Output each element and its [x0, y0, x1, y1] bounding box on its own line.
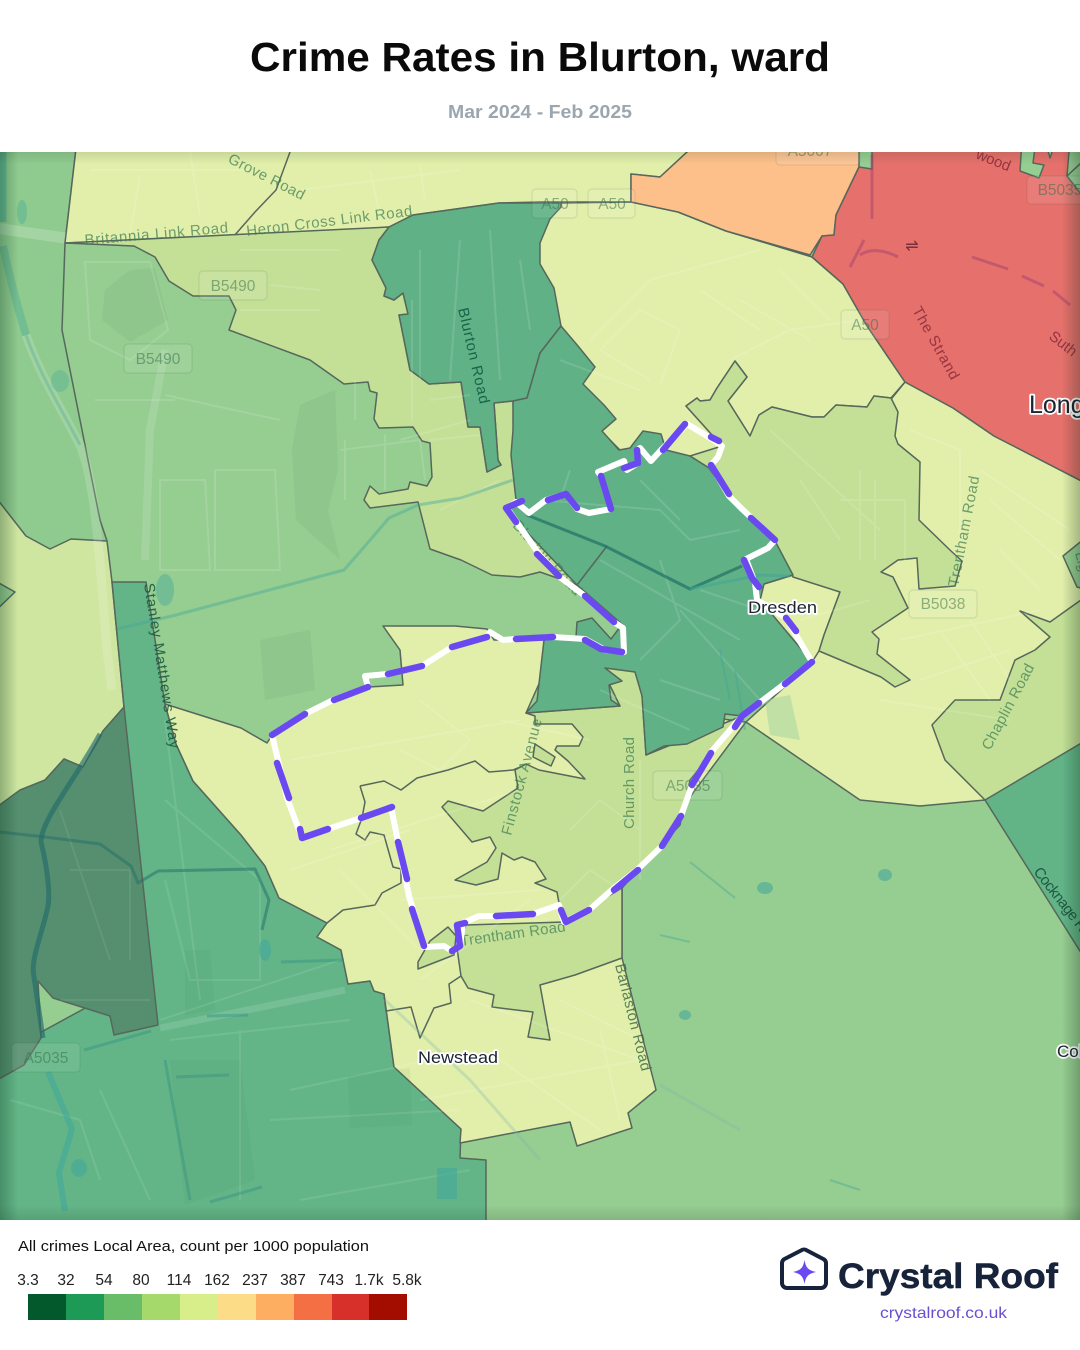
road labels: wood — [973, 146, 1013, 175]
icon: house with star — [782, 1250, 826, 1288]
map line: inner boundary between dark zones — [577, 546, 607, 585]
road labels: Blurton Road — [509, 517, 585, 599]
road number shields: A5035 — [666, 778, 710, 795]
legend tick labels: 54 — [95, 1272, 113, 1289]
logo wordmark: Crystal Roof — [838, 1257, 1058, 1296]
map zone: dark green central — [505, 326, 812, 755]
map zone: small left patch — [0, 582, 16, 608]
map zone: left yellow-green — [0, 490, 124, 815]
map edge shading — [0, 152, 1080, 1220]
road labels — [84, 146, 1080, 1073]
map zone: top-right green corner — [1066, 163, 1080, 193]
map zone: Chaplin Road light green — [932, 590, 1080, 800]
legend tick labels — [17, 1272, 422, 1289]
map zone: right-edge green patch — [1062, 541, 1080, 589]
road labels: Britannia Link Road — [84, 219, 229, 249]
road number shields: A50 — [598, 196, 626, 213]
legend title: All crimes Local Area, count per 1000 population — [18, 1239, 369, 1255]
map shaded land blocks — [398, 1068, 410, 1081]
icon: railway station: ⇌ — [905, 238, 919, 255]
map zone: far-left strip — [0, 140, 107, 549]
map: red zone rail lines — [850, 155, 1070, 305]
map zone: south ward light green — [457, 888, 622, 1040]
legend tick labels: 1.7k — [354, 1272, 384, 1289]
ward boundary: purple dashes — [272, 424, 812, 951]
road number shields: A50 — [541, 196, 569, 213]
road labels: Church Road — [621, 737, 638, 829]
legend tick labels: 237 — [242, 1272, 268, 1289]
map zone: east light green — [686, 361, 962, 687]
legend tick labels: 387 — [280, 1272, 306, 1289]
title: Crime Rates in Blurton, ward — [250, 34, 830, 80]
map: pale park block near Dresden — [765, 695, 800, 740]
subtitle: date range: Mar 2024 - Feb 2025 — [448, 102, 632, 122]
road number shields: B5490 — [136, 351, 181, 368]
map zone: ward light green — [442, 665, 742, 922]
map zone: orange — [631, 140, 859, 255]
map zone: teal south-west — [0, 582, 486, 1235]
map streets — [0, 152, 1070, 1200]
legend tick labels: 114 — [167, 1272, 192, 1289]
road labels: Barlaston Road — [611, 962, 654, 1073]
road labels: Heron Cross Link Road — [245, 203, 413, 240]
road number shields: A5007 — [788, 143, 832, 160]
map zone: Dresden pale yellow — [760, 575, 840, 662]
map zone: dark grey-green — [0, 707, 158, 1084]
map zone: small patch near Trentham Road — [418, 927, 456, 969]
road number shields: A5035 — [24, 1050, 68, 1067]
place labels: Dresden — [748, 598, 817, 617]
ward boundary: white line — [272, 424, 812, 951]
logo — [782, 1250, 1058, 1322]
road labels: Trentham Road — [459, 918, 567, 950]
road labels: Finstock Avenue — [498, 717, 546, 837]
road labels: Stanley Matthews Way — [140, 582, 183, 750]
map line: west boundary of far-left strip — [62, 140, 107, 541]
map zone: south-east teal — [984, 743, 1080, 952]
road labels: Blurton Road — [454, 306, 493, 405]
road labels: Suth — [1046, 328, 1080, 360]
map lines: internal ward boundaries — [327, 761, 523, 1038]
map zone: dark green north — [372, 203, 561, 472]
road labels: Chaplin Road — [979, 661, 1038, 753]
map zone: ward central pale yellow — [165, 626, 746, 1146]
road labels: The Strand — [909, 304, 963, 383]
website url: crystalroof.co.uk — [880, 1305, 1008, 1322]
legend tick labels: 162 — [204, 1272, 230, 1289]
road labels: Trentham Road — [945, 475, 983, 588]
map waterways and ponds — [0, 152, 860, 1211]
road labels: Grove Road — [225, 150, 308, 204]
legend tick labels: 32 — [57, 1272, 75, 1289]
map zone: north yellow strip — [64, 152, 686, 244]
map zone: east pale yellow — [746, 382, 1080, 806]
legend tick labels: 5.8k — [392, 1272, 422, 1289]
road number shields: A50 — [851, 317, 879, 334]
choropleth map: Newstead — [418, 1048, 498, 1067]
legend tick labels: 80 — [132, 1272, 150, 1289]
map zone: north-east pale yellow — [530, 202, 905, 470]
map zone: red — [812, 140, 1080, 488]
legend tick labels: 3.3 — [17, 1272, 39, 1289]
legend — [17, 1239, 422, 1320]
map line: Grove Road boundary — [234, 152, 290, 236]
map zone: north-west light green — [65, 227, 577, 585]
map zone: small light green patch — [533, 744, 555, 766]
road number shields: B5490 — [211, 278, 256, 295]
map zone: medium green base — [0, 152, 1080, 1220]
legend tick labels: 743 — [318, 1272, 344, 1289]
legend colour scale — [28, 1294, 407, 1320]
road number shields — [12, 135, 1080, 1072]
road number shields: B5038 — [921, 596, 965, 613]
